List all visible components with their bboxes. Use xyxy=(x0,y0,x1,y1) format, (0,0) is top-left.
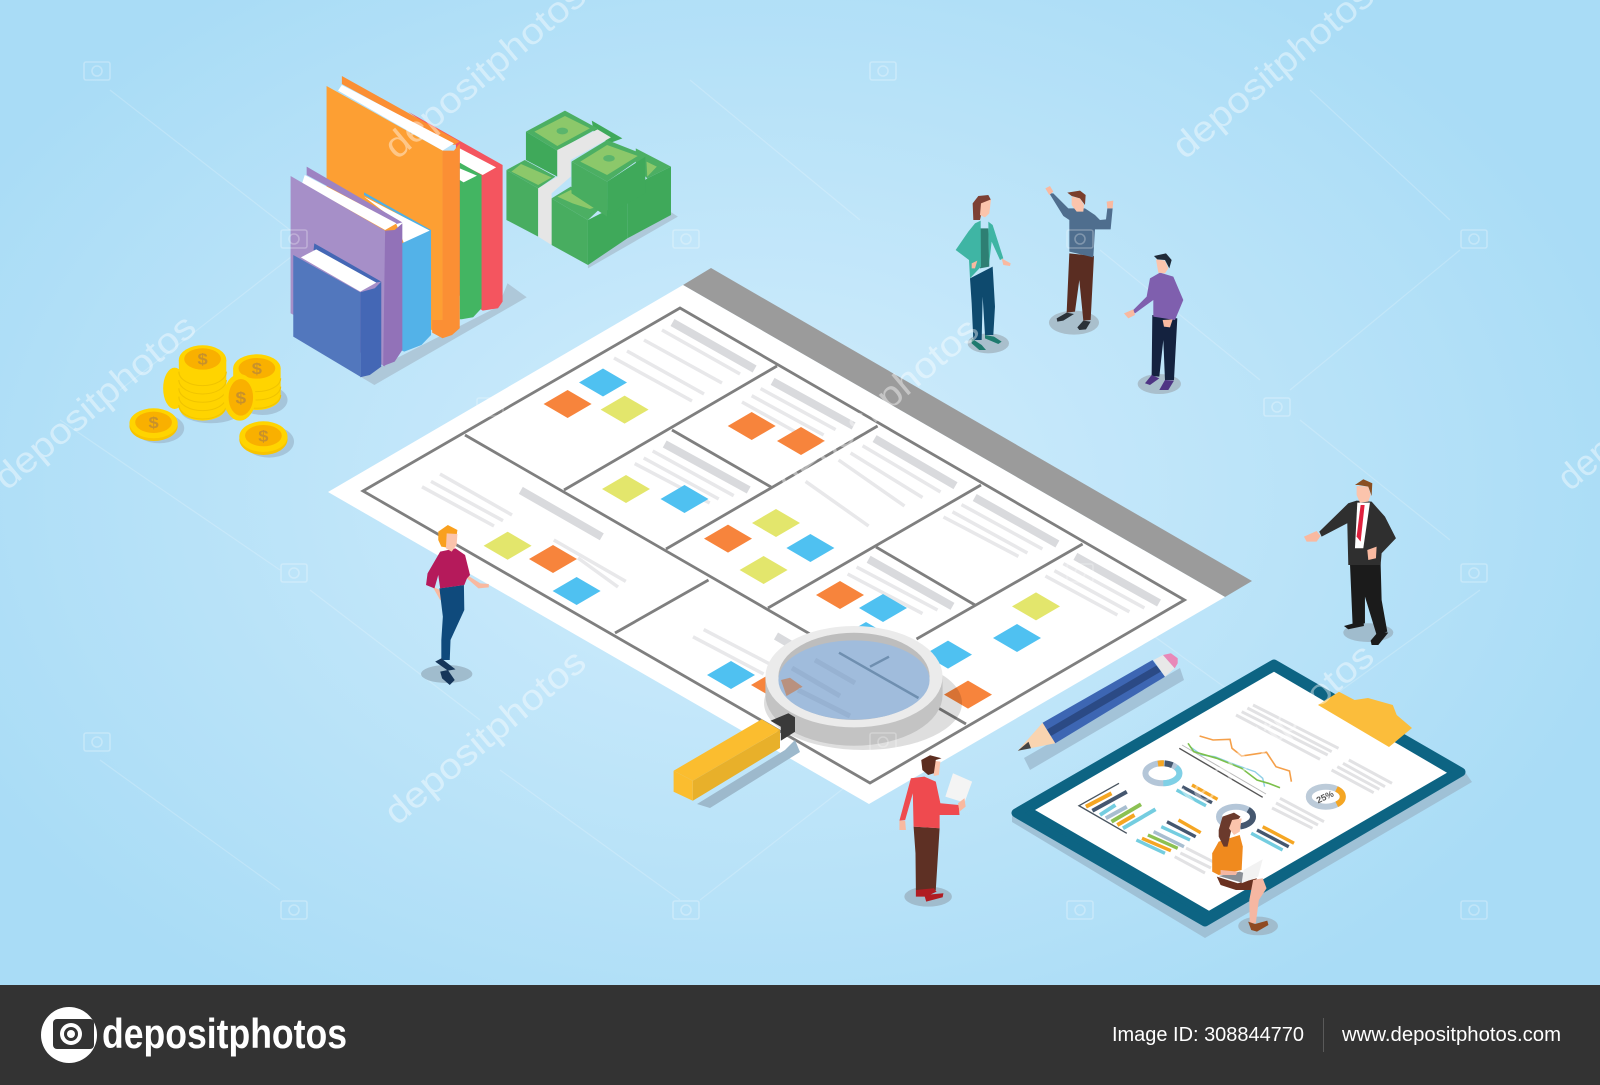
paper band xyxy=(538,129,611,245)
pencil body xyxy=(1043,660,1165,743)
man waving in blue sweater xyxy=(1045,186,1113,335)
cell grid frame xyxy=(363,308,1184,783)
businessman in suit xyxy=(1304,479,1396,645)
flat coin right: $ xyxy=(258,426,269,445)
orange book xyxy=(327,76,460,338)
donut chart behind seated woman xyxy=(1219,807,1253,827)
depositphotos text watermarks: depositphotos xyxy=(769,308,986,501)
bar group one xyxy=(1177,785,1218,806)
camera watermarks xyxy=(84,62,1487,919)
image id: Image ID: 308844770 xyxy=(1112,1024,1304,1046)
sheet header band xyxy=(683,268,1252,597)
flat coin right xyxy=(239,421,288,455)
magnifier shadow xyxy=(764,656,962,750)
top front bundle xyxy=(571,140,645,217)
magnifier ring xyxy=(765,626,943,727)
magnifier body xyxy=(765,644,943,746)
donut chart with percentage: 25% xyxy=(1315,789,1335,805)
magnifying glass xyxy=(674,626,962,808)
depositphotos text watermarks: depositphotos xyxy=(1164,634,1381,827)
document sheet xyxy=(328,268,1252,804)
front bundle xyxy=(552,187,627,265)
bar chart xyxy=(1079,783,1156,833)
pencil shadow xyxy=(1024,668,1184,770)
flat coin left: $ xyxy=(148,413,159,432)
clipboard clip xyxy=(1318,692,1412,747)
money shadow xyxy=(588,212,678,268)
depositphotos text watermarks xyxy=(0,0,1600,833)
purple book xyxy=(291,167,402,367)
books shadow xyxy=(360,283,527,385)
coin stack left: $ xyxy=(197,350,208,368)
sheet paper xyxy=(328,285,1225,804)
pencil xyxy=(1018,653,1184,770)
footer logo wordmark: depositphotos xyxy=(102,1010,347,1057)
green book xyxy=(460,163,482,319)
clipboard xyxy=(1012,664,1472,938)
books xyxy=(291,76,527,385)
faint background lines xyxy=(60,80,1480,900)
upright coin right xyxy=(224,374,256,421)
flat coin left xyxy=(129,408,178,441)
seated woman with laptop xyxy=(1212,813,1278,935)
pencil eraser xyxy=(1163,653,1178,668)
right back bundle xyxy=(627,148,671,238)
clipboard board xyxy=(1016,664,1461,922)
sticky notes xyxy=(484,368,1060,709)
pencil wood xyxy=(1018,723,1055,751)
upright coin left xyxy=(163,368,186,409)
clipboard paper xyxy=(1035,672,1447,911)
footer band xyxy=(0,985,1600,1085)
back bundle xyxy=(526,111,622,177)
donut chart with percentage xyxy=(1309,787,1343,807)
woman in pink top xyxy=(421,525,489,685)
left bundle xyxy=(506,160,555,237)
footer logo mark xyxy=(41,1007,97,1063)
magnifier connector xyxy=(770,713,795,741)
line chart xyxy=(1179,736,1291,797)
gold coins xyxy=(129,345,294,458)
coin stack left xyxy=(179,345,226,421)
coin stack right xyxy=(233,354,281,410)
pencil ferrule xyxy=(1154,655,1175,677)
coin shadows xyxy=(134,385,294,458)
gray text lines in cells xyxy=(422,330,1144,674)
paper text lines xyxy=(1175,705,1392,873)
website url: www.depositphotos.com xyxy=(1341,1024,1561,1046)
clipboard shadow xyxy=(1012,772,1472,938)
light blue book xyxy=(364,192,431,352)
donut chart xyxy=(1145,763,1179,783)
magnifier handle xyxy=(674,719,780,801)
cell header bars xyxy=(521,322,1159,650)
handle shadow xyxy=(697,740,800,808)
man in red sweater holding paper xyxy=(899,755,972,907)
woman in teal jacket xyxy=(956,195,1011,353)
man in purple sweater xyxy=(1124,253,1183,394)
bar group three xyxy=(1251,827,1294,850)
pencil tip xyxy=(1018,742,1031,751)
money stacks xyxy=(506,111,678,268)
depositphotos text watermarks: depositphotos xyxy=(376,640,593,833)
red book xyxy=(408,112,503,311)
magnifier lens xyxy=(778,640,930,720)
coin stack right: $ xyxy=(252,359,262,378)
bar group two xyxy=(1136,820,1201,853)
dark blue book xyxy=(293,243,381,377)
upright coin right: $ xyxy=(236,388,246,407)
